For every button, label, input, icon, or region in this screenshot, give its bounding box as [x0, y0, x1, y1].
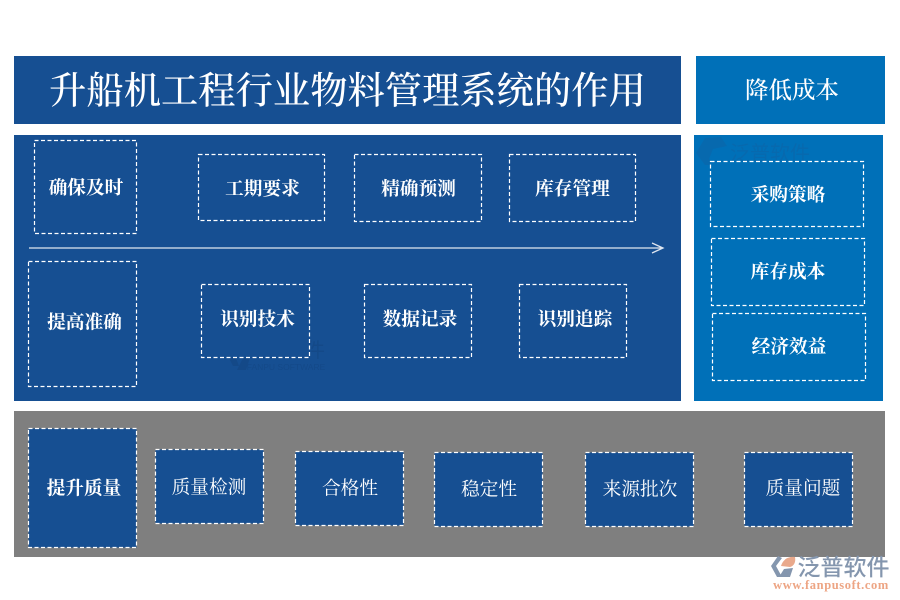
box: economic benefit — [712, 314, 866, 380]
watermark: centre: 泛普软件 — [245, 339, 325, 362]
box: quality issues: 质量问题 — [766, 478, 841, 500]
box: improve accuracy — [28, 262, 136, 386]
box: quality inspection — [156, 450, 264, 524]
box: stability — [434, 452, 542, 526]
watermark: centre — [229, 339, 326, 372]
panel: quality — [14, 411, 885, 557]
watermark: top right: 泛普软件 — [730, 142, 810, 165]
box: economic benefit: 经济效益 — [752, 336, 827, 358]
box: identification tracking — [520, 284, 626, 358]
box: improve quality: 提升质量 — [47, 478, 122, 500]
panel: timeliness and accuracy — [14, 135, 681, 401]
box: data recording — [364, 284, 472, 358]
box: schedule requirements: 工期要求 — [225, 179, 300, 200]
box: data recording: 数据记录 — [383, 308, 458, 330]
box: schedule requirements — [198, 154, 324, 220]
box: inventory management: 库存管理 — [535, 178, 610, 200]
box: inventory cost: 库存成本 — [751, 261, 826, 283]
arrow: progression — [29, 243, 663, 253]
icon: logo mark — [771, 556, 795, 577]
logo: fanpu software: 泛普软件 — [798, 554, 890, 580]
box: stability: 稳定性 — [461, 480, 517, 500]
box: conformity: 合格性 — [322, 478, 378, 500]
box: procurement strategy: 采购策略 — [751, 185, 826, 206]
box: identification technology — [202, 284, 310, 358]
box: quality inspection: 质量检测 — [172, 478, 246, 498]
box: accurate forecast: 精确预测 — [381, 179, 456, 200]
box: procurement strategy — [710, 162, 864, 226]
box: identification tracking: 识别追踪 — [538, 310, 614, 330]
box: accurate forecast — [354, 154, 482, 222]
title banner — [14, 56, 681, 124]
title banner: 升船机工程行业物料管理系统的作用 — [49, 70, 646, 112]
logo: fanpu software — [771, 554, 890, 592]
box: conformity — [296, 452, 404, 526]
box: source batch — [586, 452, 694, 526]
box: ensure timeliness — [34, 140, 136, 234]
logo: fanpu software: www.fanpusoft.com — [773, 578, 889, 592]
heading: reduce cost — [696, 56, 885, 124]
box: ensure timeliness: 确保及时 — [49, 178, 124, 199]
box: quality issues — [744, 452, 852, 526]
box: source batch: 来源批次 — [603, 480, 678, 500]
box: improve accuracy: 提高准确 — [47, 312, 122, 334]
box: inventory cost — [712, 238, 864, 306]
panel: cost factors — [694, 135, 883, 401]
watermark: centre: FANPU SOFTWARE — [247, 362, 326, 372]
box: identification technology: 识别技术 — [220, 310, 295, 330]
box: improve quality — [28, 428, 136, 548]
heading: reduce cost: 降低成本 — [745, 77, 839, 104]
box: inventory management — [510, 154, 636, 222]
watermark: top right — [696, 137, 810, 165]
